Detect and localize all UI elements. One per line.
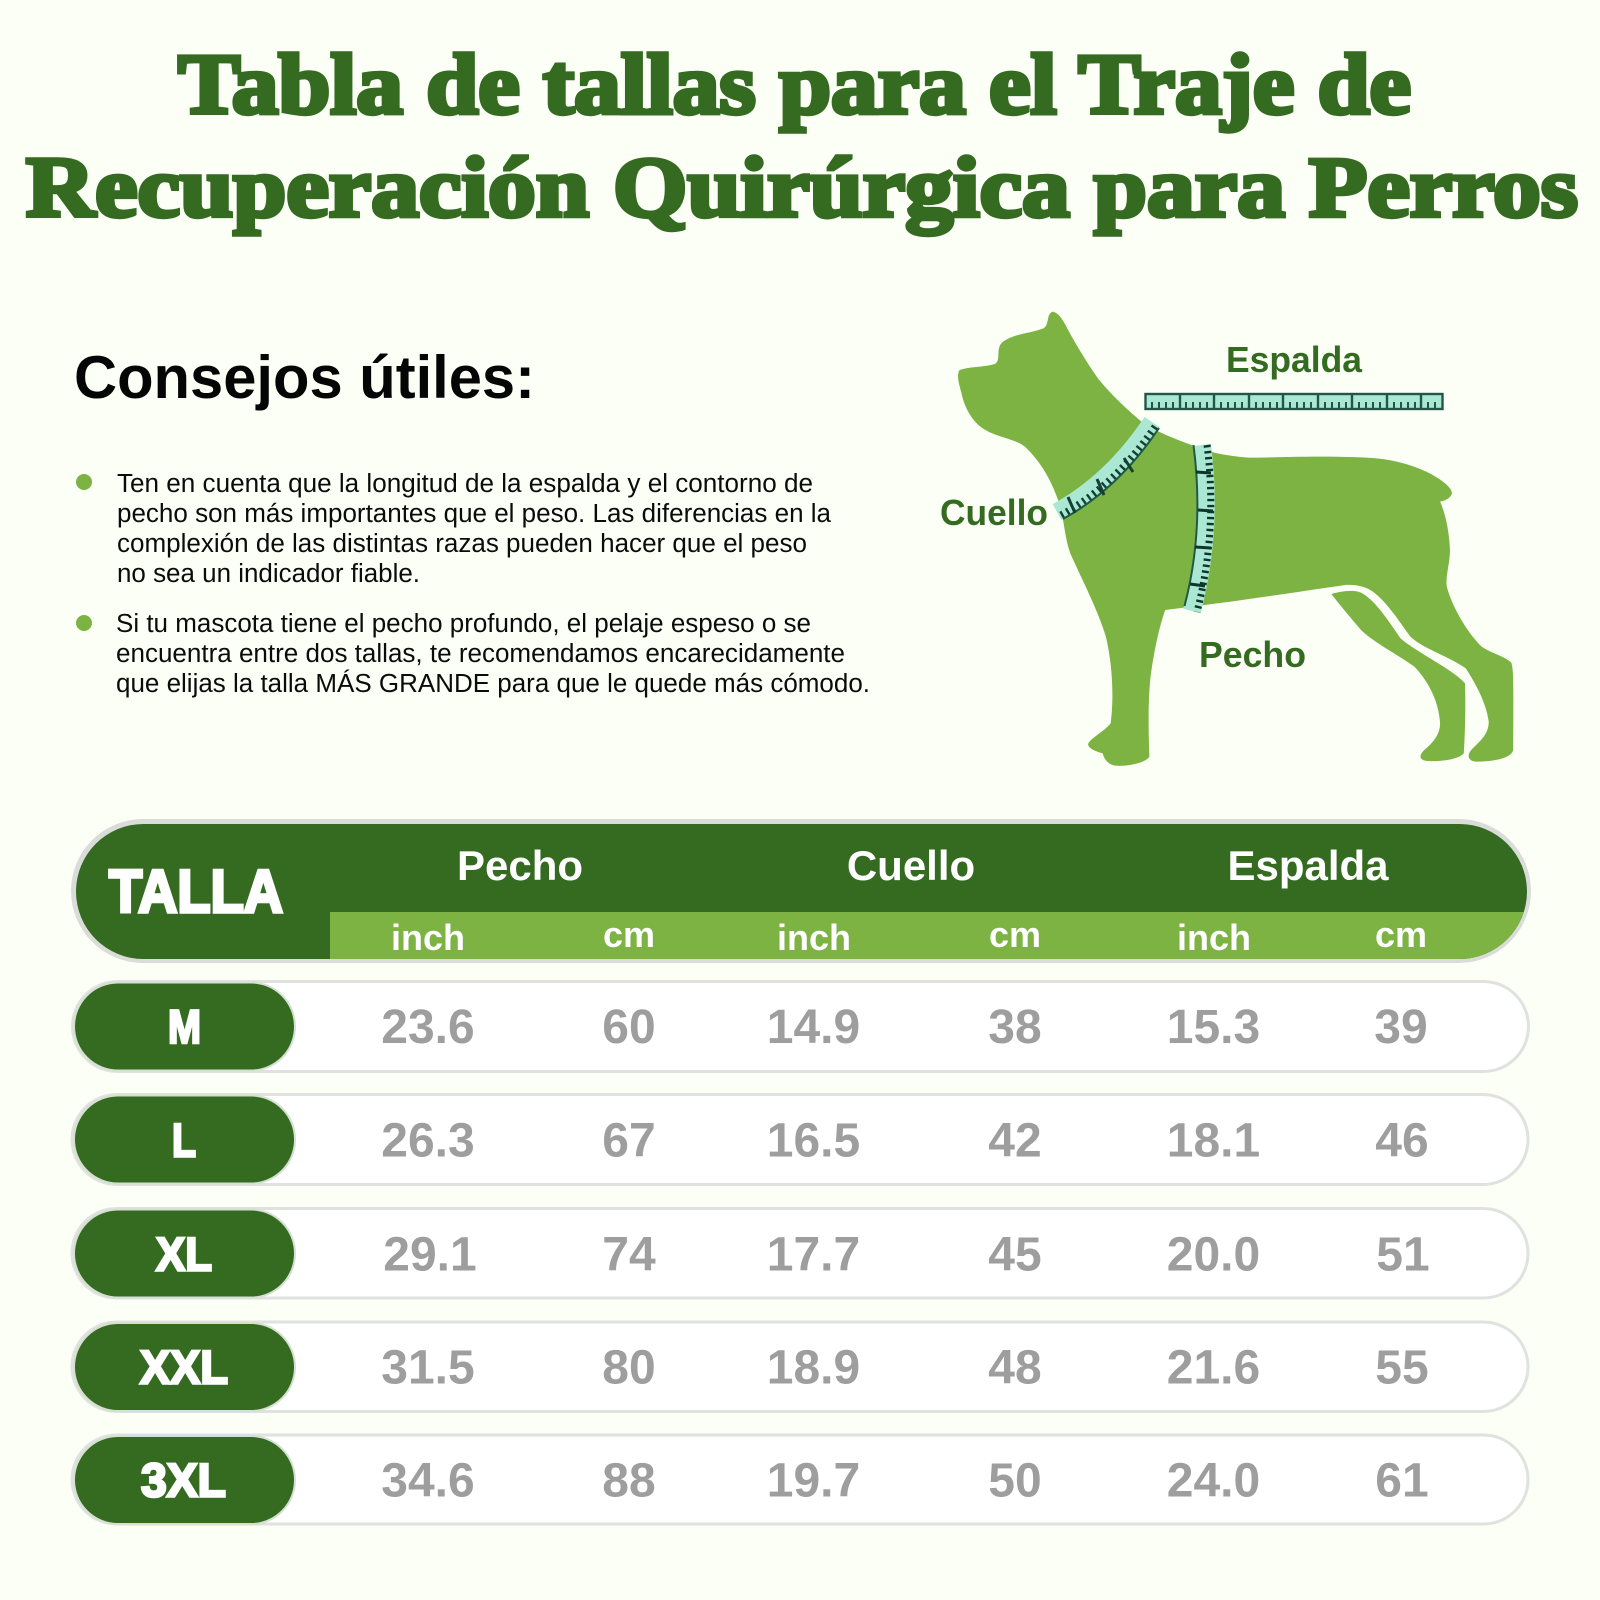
label: Pecho: Pecho (1199, 634, 1306, 675)
row: M: 23.6 (381, 1001, 475, 1054)
units row: inch (777, 917, 851, 958)
row: L (72, 1094, 1528, 1184)
row: XXL: 18.9 (767, 1342, 860, 1394)
row: 3XL: 61 (1375, 1454, 1429, 1508)
row: XL (72, 1208, 1528, 1298)
row: L: 46 (1375, 1114, 1429, 1168)
tip 1: pecho son más importantes que el peso. Las diferencias en la (117, 500, 832, 528)
row: XL: 20.0 (1167, 1228, 1260, 1282)
neck tape (1057, 422, 1159, 519)
row: L: 26.3 (381, 1114, 475, 1168)
label: Espalda: Espalda (1226, 339, 1363, 380)
row: XXL: 31.5 (381, 1342, 475, 1394)
header: espalda: Espalda (1227, 842, 1389, 889)
row: XL: XL (156, 1228, 212, 1280)
row: XXL: 48 (988, 1342, 1042, 1394)
row: 3XL: 50 (988, 1454, 1042, 1508)
row: M (72, 982, 1528, 1072)
dog silhouette (958, 312, 1513, 766)
row: M: 38 (988, 1001, 1042, 1054)
row: XXL (72, 1322, 1528, 1412)
row: 3XL: 24.0 (1167, 1454, 1260, 1508)
row: L: 67 (602, 1114, 656, 1168)
row: XXL: XXL (140, 1340, 228, 1394)
tip 2: Si tu mascota tiene el pecho profundo, el pelaje espeso o se (116, 610, 811, 638)
tip 2 (76, 610, 870, 698)
units row: cm (1375, 914, 1427, 955)
row: 3XL: 19.7 (767, 1454, 860, 1508)
row: XL: 74 (602, 1228, 656, 1282)
header: cuello: Cuello (847, 842, 975, 889)
units row (391, 914, 1427, 958)
row: M: M (168, 1000, 201, 1053)
row: XXL: 21.6 (1167, 1342, 1260, 1394)
row: XXL: 55 (1375, 1342, 1429, 1394)
row: 3XL (72, 1435, 1528, 1524)
title (26, 36, 1578, 235)
size table (71, 819, 1531, 1524)
row: L: 16.5 (767, 1114, 860, 1168)
row: M: 39 (1374, 1001, 1428, 1054)
tip 1: Ten en cuenta que la longitud de la espalda y el contorno de (117, 470, 813, 498)
table header (71, 819, 1531, 963)
header label: talla: TALLA (109, 858, 283, 925)
row: XXL: 80 (602, 1342, 656, 1394)
row: M: 60 (602, 1001, 656, 1054)
row: M: 15.3 (1167, 1001, 1260, 1054)
dog measuring diagram (940, 312, 1513, 766)
tip 1: complexión de las distintas razas pueden hacer que el peso (117, 530, 807, 558)
tip 2: que elijas la talla MÁS GRANDE para que le quede más cómodo. (116, 669, 870, 698)
row: XL: 51 (1376, 1228, 1430, 1282)
chest tape (1184, 445, 1213, 612)
title: Tabla de tallas para el Traje de (178, 36, 1411, 132)
row: XL: 17.7 (767, 1228, 860, 1282)
units row: cm (989, 914, 1041, 955)
row: XL: 45 (988, 1228, 1042, 1282)
row: 3XL: 88 (602, 1454, 656, 1508)
row: M: 14.9 (767, 1001, 860, 1054)
header: pecho: Pecho (457, 842, 583, 889)
row: 3XL: 3XL (141, 1454, 226, 1506)
units row: inch (1177, 917, 1251, 958)
row: L: 18.1 (1167, 1114, 1260, 1168)
heading: consejos: Consejos útiles: (74, 344, 535, 411)
label: Cuello: Cuello (940, 492, 1048, 533)
tip 1 (76, 470, 832, 588)
tip 2: encuentra entre dos tallas, te recomendamos encarecidamente (116, 640, 845, 668)
title: Recuperación Quirúrgica para Perros (26, 139, 1578, 235)
row: 3XL: 34.6 (381, 1454, 475, 1508)
units row: inch (391, 917, 465, 958)
row: L: L (172, 1114, 196, 1166)
units row: cm (603, 914, 655, 955)
row: L: 42 (988, 1114, 1042, 1168)
back ruler (1146, 394, 1442, 409)
row: XL: 29.1 (383, 1228, 477, 1282)
tip 1: no sea un indicador fiable. (117, 560, 420, 588)
